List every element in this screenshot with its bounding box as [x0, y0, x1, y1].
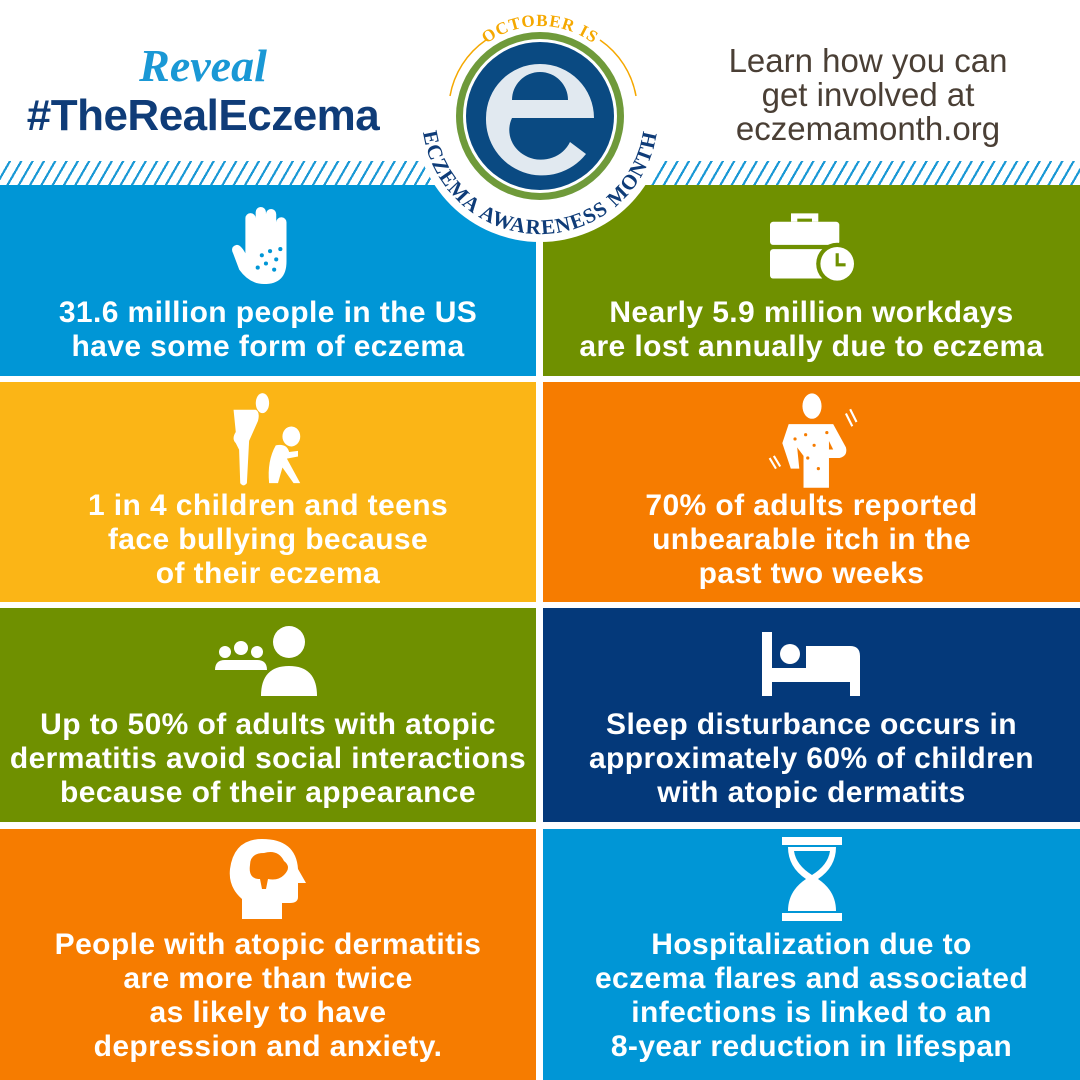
icon: hand [232, 207, 286, 284]
call to action text: eczemamonth.org [736, 110, 1000, 147]
title [27, 40, 380, 140]
call to action text [729, 42, 1007, 147]
text [59, 296, 477, 363]
panel: depression: are more than twice [123, 962, 413, 995]
panel: social [0, 608, 536, 822]
call to action text: Learn how you can [729, 42, 1007, 79]
call to action text: get involved at [762, 76, 974, 113]
logo: Eczema Awareness Month: ECZEMA AWARENESS MONTH [423, 130, 657, 234]
panel: bullying [0, 382, 536, 602]
panel: social: because of their appearance [60, 776, 476, 809]
panel: sleep: Sleep disturbance occurs in [606, 708, 1017, 741]
panel: hospitalization: infections is linked to an [631, 996, 992, 1029]
stripes band [0, 161, 1080, 185]
panel: depression: People with atopic dermatitis [55, 928, 481, 961]
icon: head brain [230, 839, 306, 919]
panel: sleep: approximately 60% of children [589, 742, 1034, 775]
panel: depression: as likely to have [150, 996, 386, 1029]
logo: Eczema Awareness Month [423, 14, 657, 242]
title: Reveal [139, 40, 267, 91]
panel: workdays: are lost annually due to eczema [579, 330, 1044, 363]
icon: briefcase clock [770, 213, 854, 281]
panel: sleep: with atopic dermatits [657, 776, 966, 809]
icon: bed [762, 632, 860, 696]
text: 31.6 million people in the US [59, 296, 477, 329]
panel: bullying: of their eczema [156, 557, 380, 590]
panel: depression [0, 829, 536, 1080]
panel: sleep [543, 608, 1080, 822]
text: have some form of eczema [71, 330, 465, 363]
icon: bullying figures [234, 393, 300, 486]
panel: itch: unbearable itch in the [652, 523, 971, 556]
panel: social: Up to 50% of adults with atopic [40, 708, 496, 741]
panel: itch [543, 382, 1080, 602]
panel: bullying: 1 in 4 children and teens [88, 489, 448, 522]
panel: 31.6 million [0, 185, 536, 376]
icon: itching person [768, 393, 858, 488]
panel: hospitalization [543, 829, 1080, 1080]
panel: social: dermatitis avoid social interactions [10, 742, 526, 775]
panel: hospitalization: eczema flares and associated [595, 962, 1028, 995]
panel: workdays: Nearly 5.9 million workdays [609, 296, 1014, 329]
panel: hospitalization: Hospitalization due to [651, 928, 972, 961]
panel: depression: depression and anxiety. [94, 1030, 442, 1063]
panel: itch: 70% of adults reported [645, 489, 978, 522]
title: #TheRealEczema [27, 91, 379, 140]
panel: hospitalization: 8-year reduction in lifespan [611, 1030, 1012, 1063]
icon: hourglass [782, 837, 842, 921]
icon: people [215, 626, 317, 696]
panel: itch: past two weeks [699, 557, 924, 590]
panel: bullying: face bullying because [108, 523, 428, 556]
panel: workdays [543, 185, 1080, 376]
logo: Eczema Awareness Month: OCTOBER IS [482, 14, 598, 42]
